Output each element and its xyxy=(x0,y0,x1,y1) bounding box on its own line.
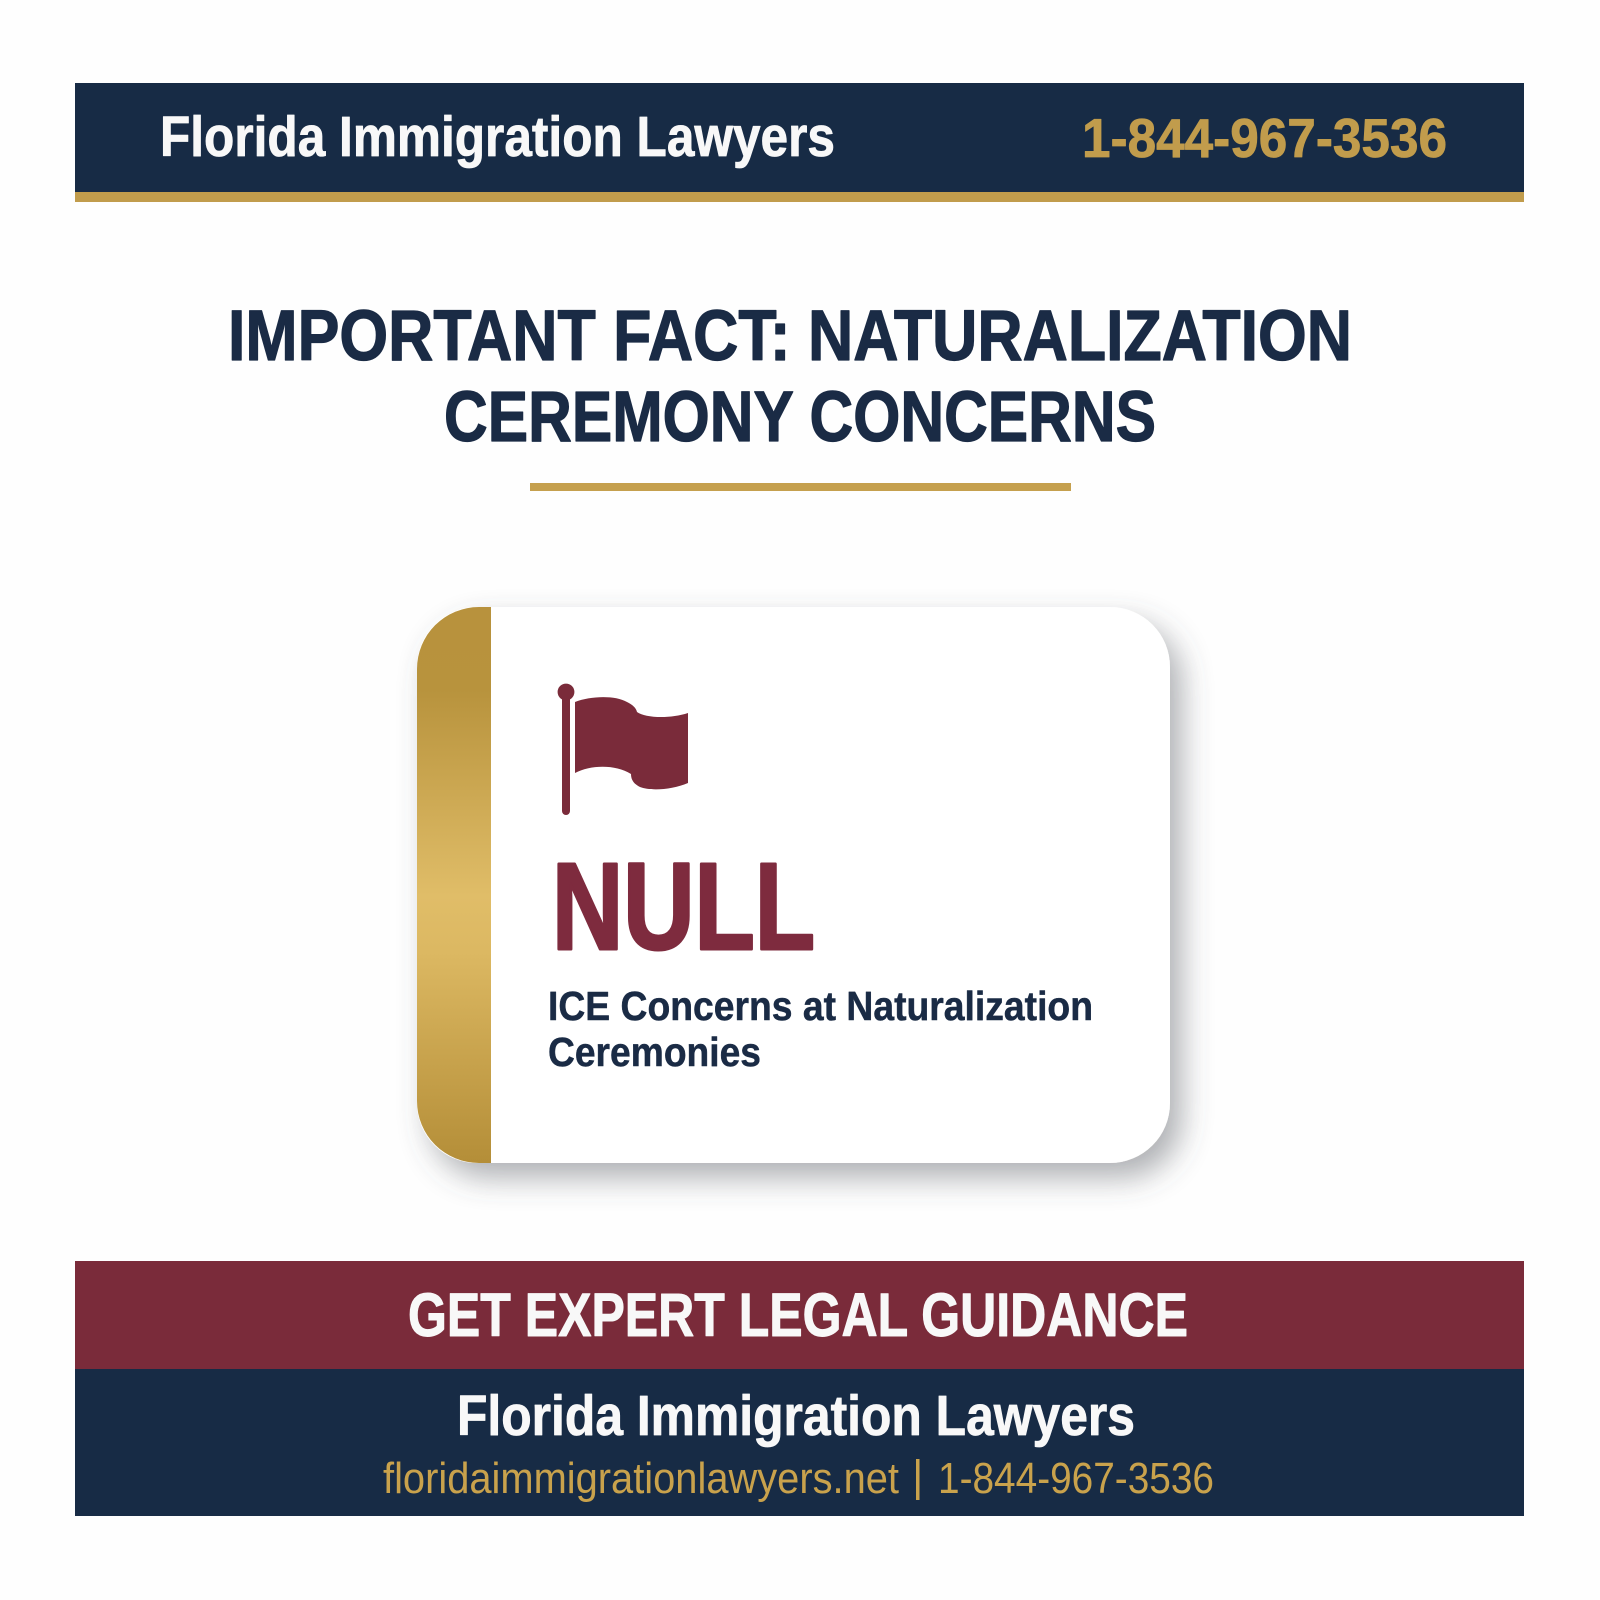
panel: fact card xyxy=(417,607,1170,1163)
title xyxy=(228,297,1352,457)
footer background xyxy=(75,1369,1524,1516)
footer contact panel xyxy=(75,1369,1524,1516)
header phone number: 1-844-967-3536 xyxy=(1082,107,1447,169)
footer firm name: Florida Immigration Lawyers xyxy=(457,1384,1135,1448)
header background xyxy=(75,83,1524,192)
call to action text: GET EXPERT LEGAL GUIDANCE xyxy=(408,1281,1188,1349)
footer website and phone: 1-844-967-3536 xyxy=(938,1454,1214,1503)
footer website and phone: floridaimmigrationlawyers.net xyxy=(383,1454,899,1503)
header gold rule xyxy=(75,192,1524,202)
call to action background xyxy=(75,1261,1524,1369)
header firm name: Florida Immigration Lawyers xyxy=(160,105,835,169)
call to action banner xyxy=(75,1261,1524,1369)
card description xyxy=(548,983,1093,1075)
card description: Ceremonies xyxy=(548,1029,761,1075)
title underline xyxy=(530,483,1071,491)
card background xyxy=(417,607,1170,1163)
card headline: NULL xyxy=(552,839,815,976)
card description: ICE Concerns at Naturalization xyxy=(548,983,1093,1029)
header banner xyxy=(75,83,1524,202)
icon: red flag xyxy=(558,684,688,815)
title line 1: IMPORTANT FACT: NATURALIZATION xyxy=(228,297,1352,376)
footer website and phone xyxy=(383,1454,1214,1503)
card gold side strip xyxy=(417,607,491,1163)
title line 2: CEREMONY CONCERNS xyxy=(444,378,1156,457)
